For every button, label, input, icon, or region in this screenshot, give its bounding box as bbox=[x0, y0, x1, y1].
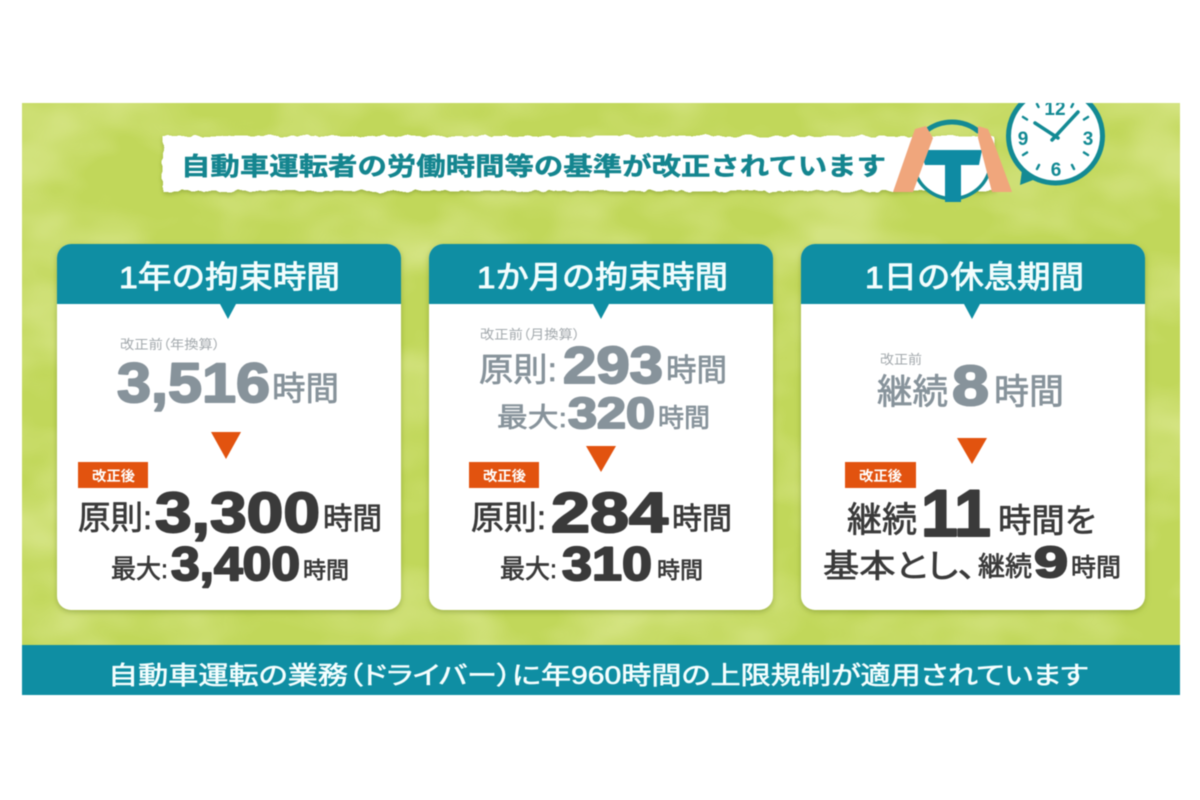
after badge: 改正後 bbox=[859, 468, 902, 484]
after value line one bbox=[847, 476, 1098, 550]
card header bbox=[57, 244, 401, 319]
after value principle: 284 bbox=[551, 481, 668, 545]
after value line two bbox=[823, 538, 1121, 587]
before label: 改正前（年換算） bbox=[120, 337, 220, 352]
before value principle: 原則: bbox=[479, 351, 557, 388]
after value line one: 11 bbox=[921, 476, 991, 550]
after value principle bbox=[78, 481, 382, 545]
torn paper strip bbox=[163, 136, 995, 191]
card header bbox=[801, 244, 1145, 319]
before value bbox=[117, 351, 339, 414]
after badge: 改正後 bbox=[92, 468, 135, 484]
arrow bbox=[211, 432, 241, 459]
panel: one month restraint time bbox=[429, 244, 773, 610]
before value: 3,516 bbox=[117, 351, 270, 414]
card body bbox=[57, 244, 401, 610]
before value maximum: 320 bbox=[568, 389, 655, 438]
after badge bbox=[845, 462, 916, 488]
icon: clock speech bubble: 9 bbox=[1018, 129, 1028, 150]
header label: 1か月の拘束時間 bbox=[477, 260, 728, 295]
footer text: 自動車運転の業務（ドライバー）に年960時間の上限規制が適用されています bbox=[108, 662, 1088, 690]
before value: 8 bbox=[952, 354, 989, 418]
after value maximum: 3,400 bbox=[171, 537, 300, 590]
after value maximum: 最大: bbox=[500, 554, 557, 584]
after value principle: 原則: bbox=[78, 499, 152, 536]
after value principle: 原則: bbox=[471, 499, 546, 536]
panel: one year restraint time bbox=[57, 244, 401, 610]
after value line two: 継続 bbox=[978, 552, 1032, 582]
panel: one day rest period bbox=[801, 244, 1145, 610]
before value principle bbox=[479, 337, 727, 395]
card body bbox=[801, 244, 1145, 610]
before value maximum: 時間 bbox=[658, 403, 710, 433]
after value line two: 基本とし、 bbox=[823, 548, 976, 584]
card header bbox=[429, 244, 773, 319]
card body bbox=[429, 244, 773, 610]
after value principle: 3,300 bbox=[155, 481, 320, 545]
before label: 改正前 bbox=[880, 352, 922, 367]
after value principle: 時間 bbox=[323, 503, 382, 536]
before value: 継続 bbox=[877, 373, 948, 412]
after value line two: 9 bbox=[1034, 538, 1068, 587]
after value maximum: 時間 bbox=[657, 557, 703, 583]
arrow bbox=[586, 446, 616, 472]
after badge bbox=[469, 462, 539, 488]
icon: clock speech bubble bbox=[1008, 89, 1102, 185]
after value line one: 時間を bbox=[998, 502, 1098, 539]
title banner bbox=[163, 136, 995, 191]
after value maximum: 最大: bbox=[111, 554, 168, 584]
before value principle: 293 bbox=[563, 337, 663, 395]
before value bbox=[877, 354, 1064, 418]
after value line one: 継続 bbox=[847, 501, 917, 540]
footer band bbox=[22, 645, 1180, 695]
header label: 1年の拘束時間 bbox=[119, 260, 340, 295]
panel: green textured background bbox=[22, 103, 1180, 648]
icon: clock speech bubble: 6 bbox=[1051, 160, 1061, 181]
before value maximum: 最大: bbox=[497, 403, 567, 433]
after value maximum bbox=[500, 537, 703, 590]
before value principle: 時間 bbox=[666, 353, 727, 388]
before label: 改正前（月換算） bbox=[480, 327, 580, 342]
before value: 時間 bbox=[272, 370, 339, 407]
before value: 時間 bbox=[994, 373, 1064, 412]
icon: steering wheel with arms bbox=[893, 122, 1012, 202]
after badge: 改正後 bbox=[483, 468, 526, 484]
after value maximum: 310 bbox=[562, 537, 652, 590]
icon: clock speech bubble: 3 bbox=[1083, 129, 1093, 150]
after value maximum: 時間 bbox=[303, 557, 349, 583]
before value maximum bbox=[497, 389, 710, 438]
header label: 1日の休息期間 bbox=[865, 260, 1084, 295]
heading: 自動車運転者の労働時間等の基準が改正されています bbox=[181, 152, 886, 181]
after badge bbox=[78, 462, 148, 488]
after value principle: 時間 bbox=[672, 503, 732, 536]
after value principle bbox=[471, 481, 732, 545]
icon: clock speech bubble: 12 bbox=[1044, 99, 1066, 120]
arrow bbox=[957, 438, 987, 464]
after value maximum bbox=[111, 537, 349, 590]
after value line two: 時間 bbox=[1071, 554, 1121, 582]
